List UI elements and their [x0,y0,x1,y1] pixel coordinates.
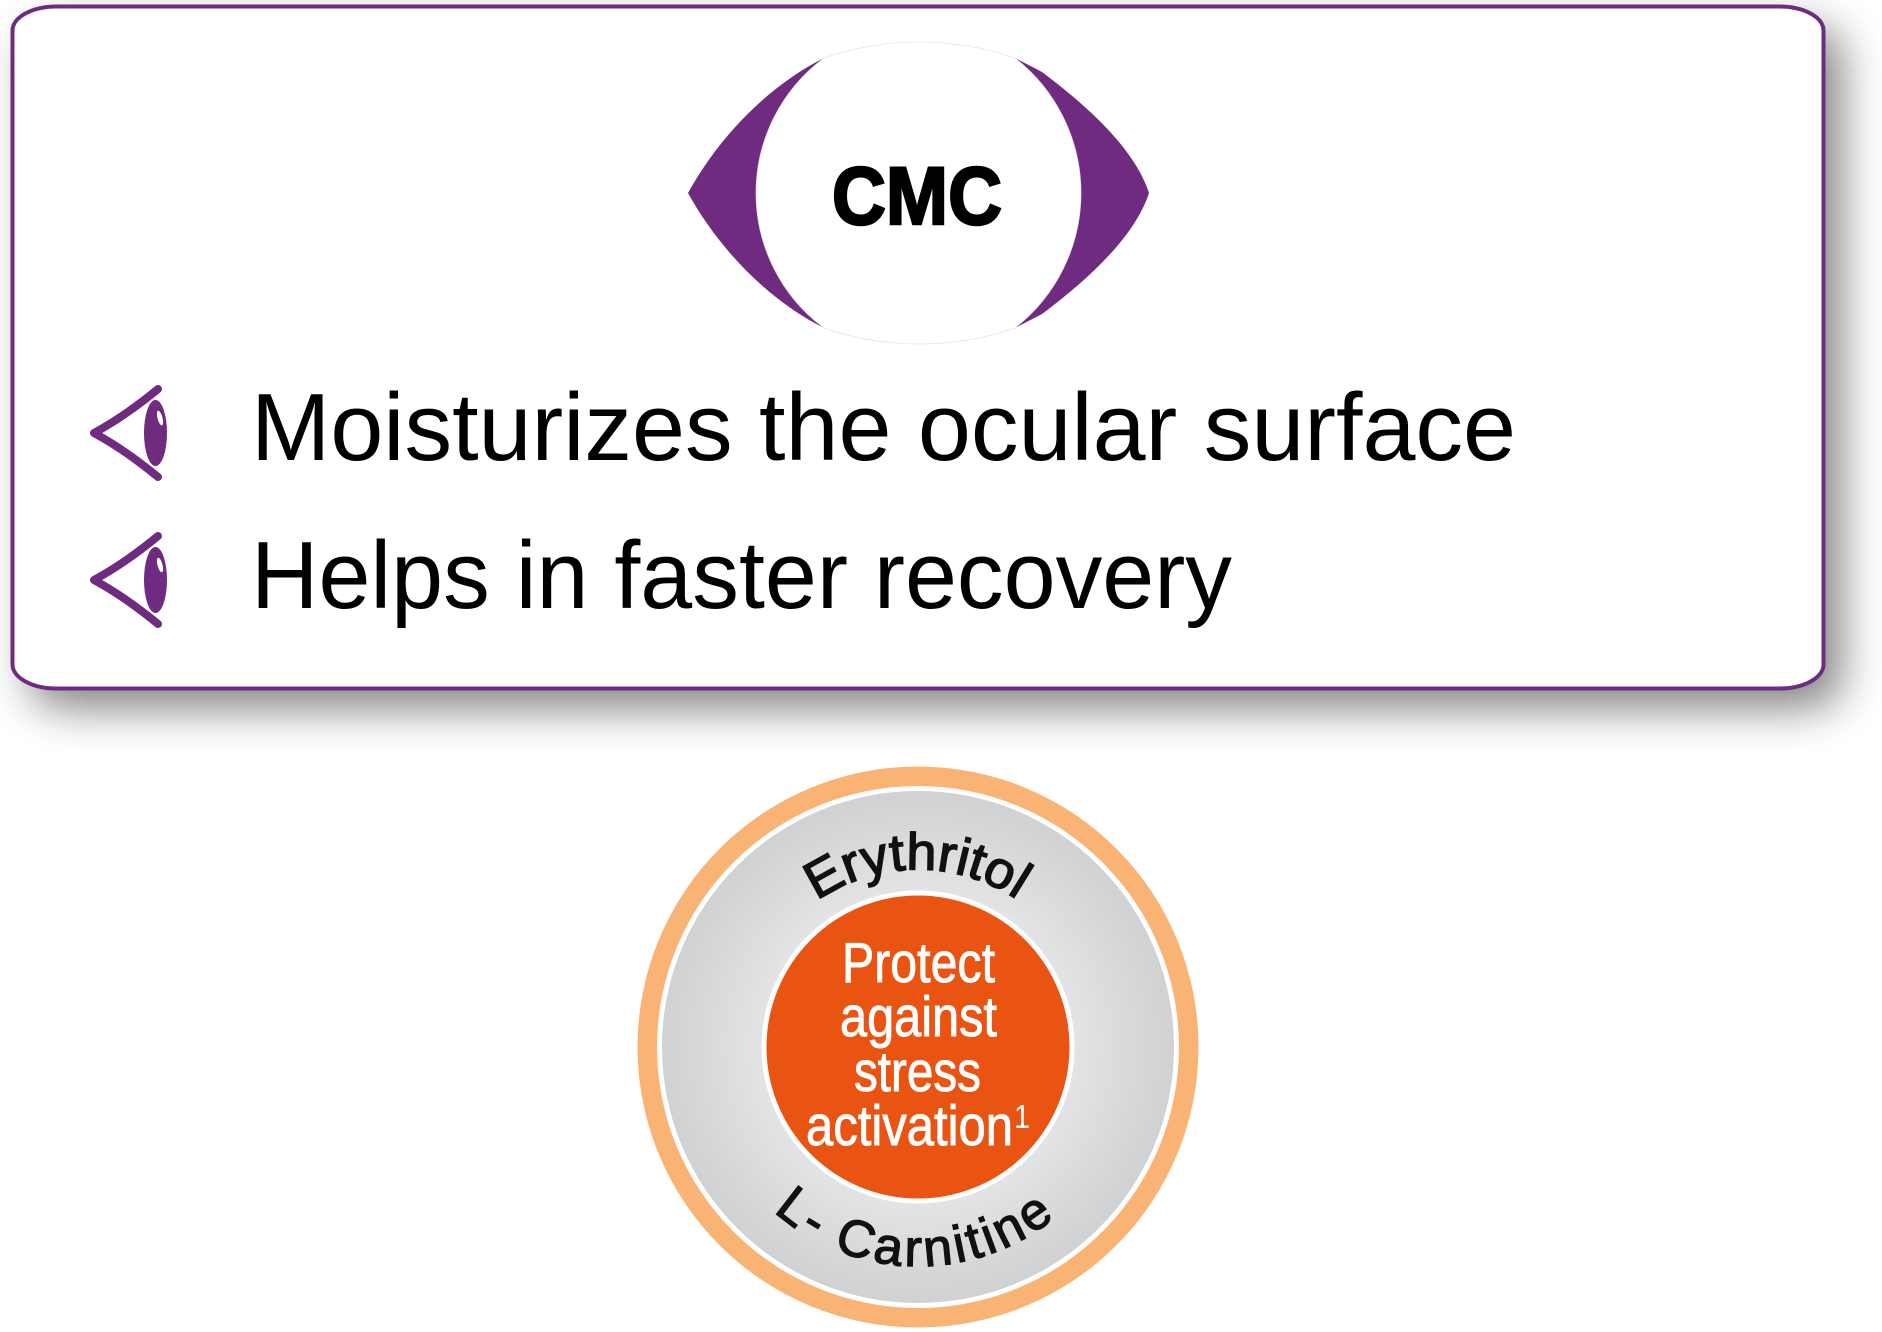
center text [806,931,1030,1158]
icon: small eye [94,389,167,477]
text: moisturizes the ocular surface: Moisturizes the ocular surface [251,374,1516,481]
bullet: faster recovery [94,522,1232,629]
line: Protect: Protect [842,931,995,995]
icon: small eye [94,536,167,624]
line: stress: stress [854,1040,981,1104]
line: against: against [840,985,997,1049]
concentric circle diagram [638,766,1198,1328]
panel shadow [30,26,1842,709]
white ring [657,786,1179,1308]
outer peach ring [638,766,1198,1328]
CMC label: CMC [832,151,1002,242]
superscript: 1 [1014,1098,1030,1135]
panel: CMC benefits [12,6,1842,709]
label: Erythritol: Erythritol [802,831,1035,900]
bullet: moisturizes [94,374,1516,481]
inner orange circle [764,893,1072,1201]
label: L-Carnitine: L- Carnitine [776,1185,1050,1267]
line: activation: activation [806,1094,1013,1158]
icon: large eye with CMC [688,42,1149,344]
eye iris [756,42,1081,344]
text: helps in faster recovery: Helps in faster recovery [251,522,1232,629]
panel border [12,6,1824,688]
gray ring [662,791,1174,1303]
eye lids [688,58,1149,328]
